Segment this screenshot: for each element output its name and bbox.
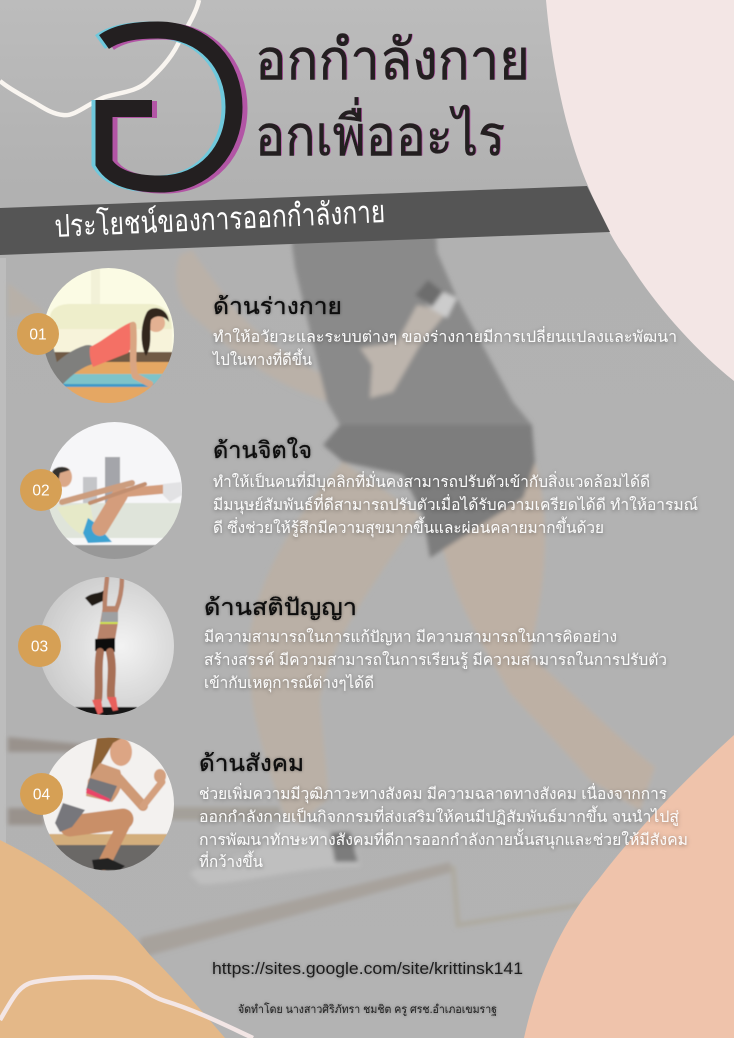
number badge 02 — [20, 469, 62, 511]
section 2: mental — [213, 437, 698, 538]
decorative shape: pink top right — [546, 0, 734, 381]
section 4: social — [199, 750, 688, 871]
title: line 1: อกกำลังกาย — [256, 28, 531, 91]
decorative line: top left curve — [0, 0, 199, 115]
section 1: physical — [211, 293, 677, 369]
banner: benefits of exercise: ประโยชน์ของการออกกำลังกาย — [54, 194, 386, 244]
photo circle 4: squat — [40, 736, 176, 873]
number badge 03: 03 — [31, 638, 48, 656]
section 4: social: ที่กว้างขึ้น — [199, 850, 263, 871]
number badge 04 — [20, 773, 63, 815]
number badge 03 — [18, 625, 61, 667]
decorative line: bottom left curve — [0, 977, 253, 1038]
title: large letter — [100, 30, 239, 185]
photo circle 2: sit-up — [45, 420, 185, 562]
background photo: runner stepping up — [8, 232, 655, 958]
section 4: social: การพัฒนาทักษะทางสังคมที่ดีการออกกำลังกายนั้นสนุกและช่วยให้มีสังคม — [199, 828, 688, 850]
number badge 02: 02 — [32, 482, 50, 500]
section 3: intellect: มีความสามารถในการแก้ปัญหา มีความสามารถในการคิดอย่าง — [204, 628, 617, 646]
number badge 01 — [17, 313, 59, 355]
section 3: intellect: ด้านสติปัญญา — [204, 594, 357, 620]
section 3: intellect: เข้ากับเหตุการณ์ต่างๆได้ดี — [204, 674, 374, 693]
number badge 01: 01 — [29, 326, 47, 344]
credit line: จัดทำโดย นางสาวศิริภัทรา ชมชิต ครู ศรช.อำเภอเขมราฐ — [238, 1002, 497, 1016]
photo circle 1: push-up — [46, 268, 174, 403]
section 1: physical: ทำให้อวัยวะและระบบต่างๆ ของร่างกายมีการเปลี่ยนแปลงและพัฒนา — [213, 326, 677, 346]
section 3: intellect — [204, 594, 667, 693]
number badge 04: 04 — [33, 786, 50, 804]
decorative shape: peach bottom right — [524, 735, 734, 1038]
decorative shape: orange bottom left — [0, 840, 225, 1038]
website url: https://sites.google.com/site/krittinsk141 — [212, 960, 523, 978]
section 4: social: ด้านสังคม — [199, 750, 304, 776]
banner: benefits of exercise — [0, 186, 610, 255]
section 1: physical: ไปในทางที่ดีขึ้น — [211, 348, 312, 369]
section 4: social: ออกกำลังกายเป็นกิจกกรมที่ส่งเสริมให้คนมีปฏิสัมพันธ์มากขึ้น จนนำไปสู่ — [199, 805, 680, 827]
title: line 1: อกกำลังกาย — [255, 28, 530, 91]
section 1: physical: ด้านร่างกาย — [213, 293, 342, 319]
title: line 2: อกเพื่ออะไร — [255, 97, 505, 167]
section 2: mental: ทำให้เป็นคนที่มีบุคลิกที่มั่นคงสามารถปรับตัวเข้ากับสิ่งแวดล้อมได้ดี — [213, 471, 650, 492]
section 2: mental: มีมนุษย์สัมพันธ์ที่ดีสามารถปรับตัวเมื่อได้รับความเครียดได้ดี ทำให้อารมณ์ — [213, 494, 698, 515]
section 3: intellect: สร้างสรรค์ มีความสามารถในการเรียนรู้ มีความสามารถในการปรับตัว — [204, 651, 667, 670]
left edge strip — [0, 258, 6, 858]
section 2: mental: ดี ซึ่งช่วยให้รู้สึกมีความสุขมากขึ้นและผ่อนคลายมากขึ้นด้วย — [213, 516, 604, 538]
title: line 2: อกเพื่ออะไร — [256, 97, 506, 167]
section 2: mental: ด้านจิตใจ — [213, 437, 312, 463]
photo circle 3: jumping — [36, 575, 178, 717]
section 4: social: ช่วยเพิ่มความมีวุฒิภาวะทางสังคม มีความฉลาดทางสังคม เนื่องจากการ — [199, 783, 667, 804]
